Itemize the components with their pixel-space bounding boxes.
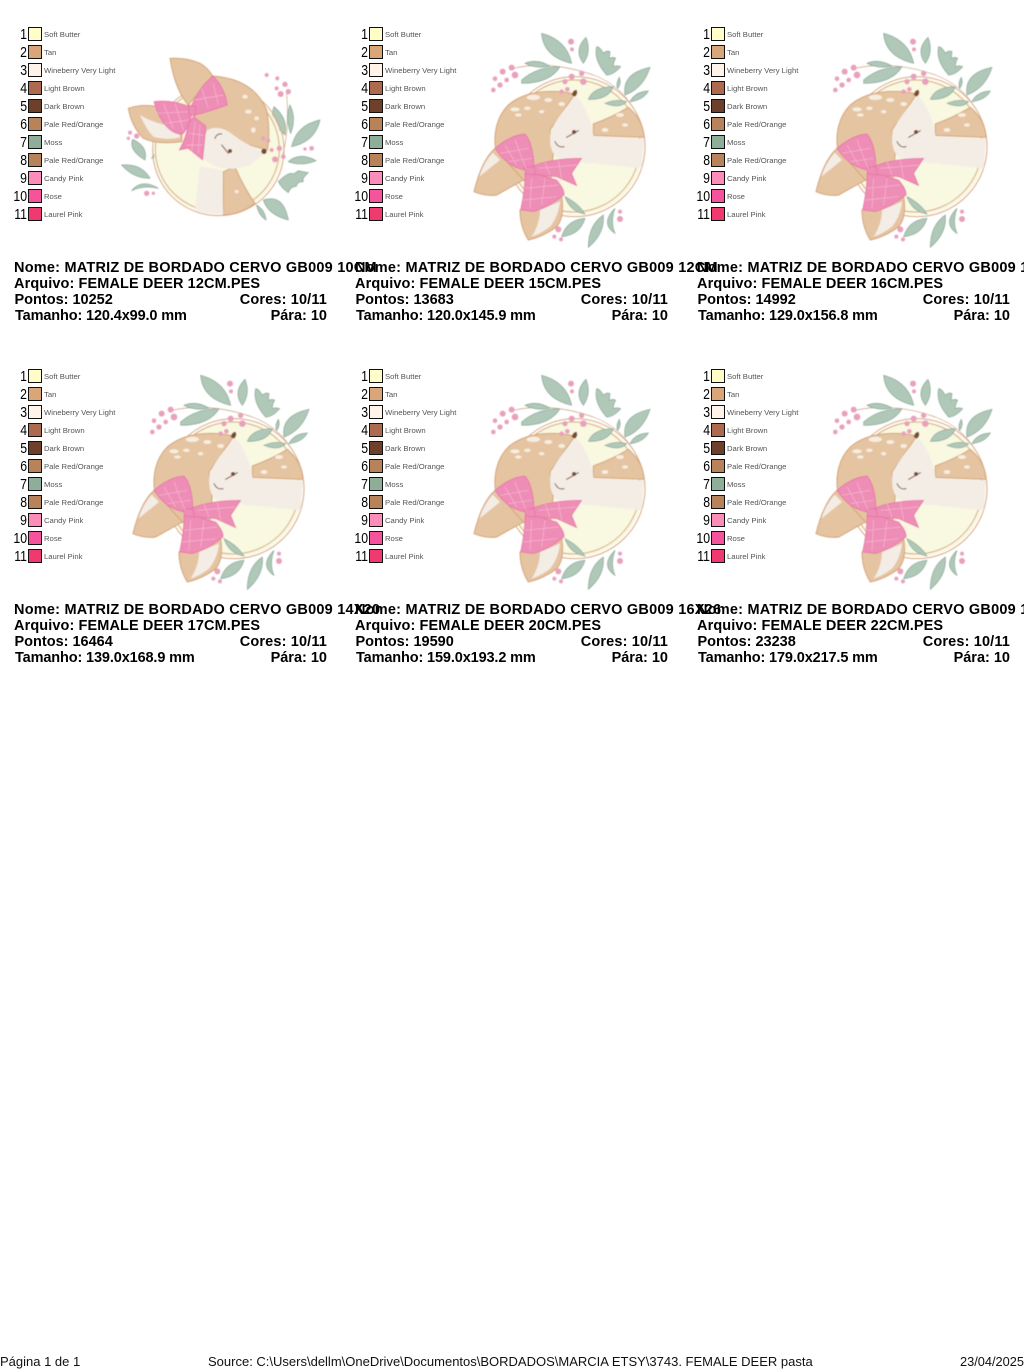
color legend: Soft Butter [727,372,764,381]
color legend: Candy Pink [385,174,424,183]
color legend: 11 [14,548,27,564]
color legend [696,26,799,222]
color legend: 9 [361,512,368,528]
color legend: Light Brown [385,426,426,435]
color legend: Soft Butter [385,30,422,39]
color legend: Light Brown [385,84,426,93]
color legend: Moss [727,480,746,489]
color legend: Soft Butter [44,30,81,39]
design details: Tamanho: 120.4x99.0 mm [15,308,187,324]
color legend: Soft Butter [44,372,81,381]
design details: Arquivo: FEMALE DEER 15CM.PES [355,276,601,292]
color legend: 4 [361,80,368,96]
color legend: Wineberry Very Light [385,66,457,75]
color legend: 10 [13,188,27,204]
color legend: Pale Red/Orange [385,462,444,471]
design details [697,602,1024,666]
color legend [696,368,799,564]
color legend: Dark Brown [44,444,84,453]
design details: Tamanho: 139.0x168.9 mm [15,650,195,666]
color legend: 8 [361,494,368,510]
color legend: 4 [703,422,710,438]
color legend: Soft Butter [385,372,422,381]
color legend: 5 [20,98,27,114]
color legend: 11 [697,206,710,222]
color legend: Light Brown [727,426,768,435]
color legend: Light Brown [44,426,85,435]
color legend: Moss [385,138,404,147]
color legend: Pale Red/Orange [727,462,786,471]
color legend: Rose [727,534,745,543]
color legend: Candy Pink [727,174,766,183]
color legend: Rose [727,192,745,201]
design details [697,260,1024,324]
design details: Pontos: 19590 [356,634,454,650]
panel: design 2 [354,26,718,324]
panel: design 1 [13,26,377,324]
color legend: Pale Red/Orange [727,156,786,165]
page footer: Página 1 de 1 [0,1354,80,1369]
color legend: 7 [20,476,27,492]
color legend: 2 [361,386,368,402]
design details: Nome: MATRIZ DE BORDADO CERVO GB009 16X26 [355,602,721,618]
color legend: 6 [361,458,368,474]
design details: Pára: 10 [612,650,668,666]
embroidery: sleeping deer with bow [133,375,309,589]
color legend: 8 [361,152,368,168]
design details: Cores: 10/11 [923,292,1010,308]
color legend: 1 [361,26,368,42]
design details: Pára: 10 [271,650,327,666]
color legend: Pale Red/Orange [44,120,103,129]
design details: Arquivo: FEMALE DEER 17CM.PES [14,618,260,634]
color legend: Dark Brown [727,102,767,111]
color legend: 7 [20,134,27,150]
color legend: Tan [385,390,397,399]
color legend: 1 [703,26,710,42]
color legend: Rose [385,192,403,201]
color legend: Dark Brown [385,444,425,453]
color legend: Wineberry Very Light [44,408,116,417]
color legend: Wineberry Very Light [44,66,116,75]
color legend: Wineberry Very Light [385,408,457,417]
design details: Cores: 10/11 [240,634,327,650]
color legend [13,368,116,564]
panel: design 3 [696,26,1024,324]
design details: Arquivo: FEMALE DEER 20CM.PES [355,618,601,634]
color legend: 6 [361,116,368,132]
color legend: Laurel Pink [727,210,766,219]
design details: Pontos: 14992 [698,292,796,308]
color legend: 5 [703,440,710,456]
color legend: 3 [703,62,710,78]
color legend: Tan [727,48,739,57]
color legend: Pale Red/Orange [44,498,103,507]
color legend [13,26,116,222]
color legend: 3 [361,404,368,420]
color legend: Dark Brown [727,444,767,453]
design details [14,602,380,666]
color legend: 7 [703,134,710,150]
color legend: 7 [361,476,368,492]
color legend: Candy Pink [44,174,83,183]
color legend: Candy Pink [44,516,83,525]
color legend: 8 [703,152,710,168]
color legend: Pale Red/Orange [727,498,786,507]
color legend: 1 [361,368,368,384]
color legend: 10 [696,530,710,546]
color legend: Wineberry Very Light [727,408,799,417]
design details: Tamanho: 179.0x217.5 mm [698,650,878,666]
color legend: 2 [20,386,27,402]
panel: design 6 [696,368,1024,666]
color legend: 11 [14,206,27,222]
color legend: 5 [361,440,368,456]
color legend: 10 [696,188,710,204]
color legend: Laurel Pink [385,210,424,219]
color legend [354,26,457,222]
color legend: Pale Red/Orange [385,498,444,507]
color legend: 9 [20,170,27,186]
color legend: Candy Pink [385,516,424,525]
color legend: 1 [20,26,27,42]
design details: Tamanho: 129.0x156.8 mm [698,308,878,324]
color legend: 11 [355,206,368,222]
color legend: Tan [44,390,56,399]
color legend: 8 [20,494,27,510]
color legend: 4 [703,80,710,96]
color legend: Pale Red/Orange [385,156,444,165]
color legend: 6 [20,116,27,132]
color legend: Laurel Pink [44,210,83,219]
page footer: Source: C:\Users\dellm\OneDrive\Documentos\BORDADOS\MARCIA ETSY\3743. FEMALE DEER pasta [208,1354,813,1369]
design details: Pára: 10 [954,650,1010,666]
color legend: 2 [703,44,710,60]
design details: Arquivo: FEMALE DEER 16CM.PES [697,276,943,292]
design details: Arquivo: FEMALE DEER 12CM.PES [14,276,260,292]
color legend: Moss [44,480,63,489]
color legend: 1 [20,368,27,384]
color legend: 5 [20,440,27,456]
color legend: 9 [703,512,710,528]
color legend: 2 [703,386,710,402]
color legend: Pale Red/Orange [44,462,103,471]
color legend: 9 [361,170,368,186]
color legend: 2 [20,44,27,60]
color legend: Tan [727,390,739,399]
color legend: 3 [20,62,27,78]
color legend: 6 [20,458,27,474]
color legend: 4 [20,422,27,438]
design details [355,260,718,324]
color legend: 9 [20,512,27,528]
color legend: Dark Brown [385,102,425,111]
color legend: 10 [354,188,368,204]
color legend: Moss [727,138,746,147]
embroidery: sleeping deer with bow [816,375,992,589]
color legend: 10 [13,530,27,546]
color legend: Pale Red/Orange [727,120,786,129]
color legend: 1 [703,368,710,384]
color legend: Light Brown [44,84,85,93]
panel: design 5 [354,368,721,666]
color legend: Dark Brown [44,102,84,111]
design details: Tamanho: 120.0x145.9 mm [356,308,536,324]
color legend: Pale Red/Orange [44,156,103,165]
design details: Pára: 10 [954,308,1010,324]
color legend: 10 [354,530,368,546]
color legend: 6 [703,458,710,474]
color legend: Candy Pink [727,516,766,525]
design details: Nome: MATRIZ DE BORDADO CERVO GB009 12CM [355,260,718,276]
color legend: Rose [44,192,62,201]
color legend: 11 [355,548,368,564]
design details: Nome: MATRIZ DE BORDADO CERVO GB009 10CM [14,260,377,276]
color legend: 3 [703,404,710,420]
color legend: 9 [703,170,710,186]
design details: Cores: 10/11 [240,292,327,308]
design details: Cores: 10/11 [923,634,1010,650]
design details: Pontos: 16464 [14,634,113,650]
panel: design 4 [13,368,380,666]
color legend: 4 [361,422,368,438]
color legend: 6 [703,116,710,132]
embroidery: sleeping deer with bow [816,33,992,247]
color legend: 4 [20,80,27,96]
color legend: 5 [361,98,368,114]
color legend: 11 [697,548,710,564]
color legend: 8 [20,152,27,168]
color legend: Laurel Pink [44,552,83,561]
page footer: 23/04/2025 [960,1354,1024,1369]
color legend: 2 [361,44,368,60]
color legend [354,368,457,564]
color legend: 3 [361,62,368,78]
color legend: Moss [385,480,404,489]
design details [14,260,377,324]
design details: Pontos: 13683 [356,292,454,308]
color legend: Soft Butter [727,30,764,39]
color legend: Light Brown [727,84,768,93]
color legend: 8 [703,494,710,510]
design details: Arquivo: FEMALE DEER 22CM.PES [697,618,943,634]
embroidery: sleeping deer with bow [474,375,650,589]
design details [355,602,721,666]
color legend: Laurel Pink [385,552,424,561]
embroidery: deer with bow, landscape [122,58,320,220]
design details: Cores: 10/11 [581,292,668,308]
design details: Pára: 10 [271,308,327,324]
color legend: Rose [44,534,62,543]
design details: Tamanho: 159.0x193.2 mm [356,650,536,666]
color legend: Tan [385,48,397,57]
color legend: Tan [44,48,56,57]
design details: Pára: 10 [612,308,668,324]
design details: Pontos: 10252 [14,292,113,308]
color legend: Rose [385,534,403,543]
color legend: Moss [44,138,63,147]
color legend: Laurel Pink [727,552,766,561]
design details: Pontos: 23238 [698,634,796,650]
color legend: Wineberry Very Light [727,66,799,75]
color legend: Pale Red/Orange [385,120,444,129]
design details: Cores: 10/11 [581,634,668,650]
embroidery: sleeping deer with bow [474,33,650,247]
design details: Nome: MATRIZ DE BORDADO CERVO GB009 14X20 [14,602,380,618]
page footer [0,1354,1024,1369]
color legend: 5 [703,98,710,114]
color legend: 7 [703,476,710,492]
color legend: 3 [20,404,27,420]
color legend: 7 [361,134,368,150]
